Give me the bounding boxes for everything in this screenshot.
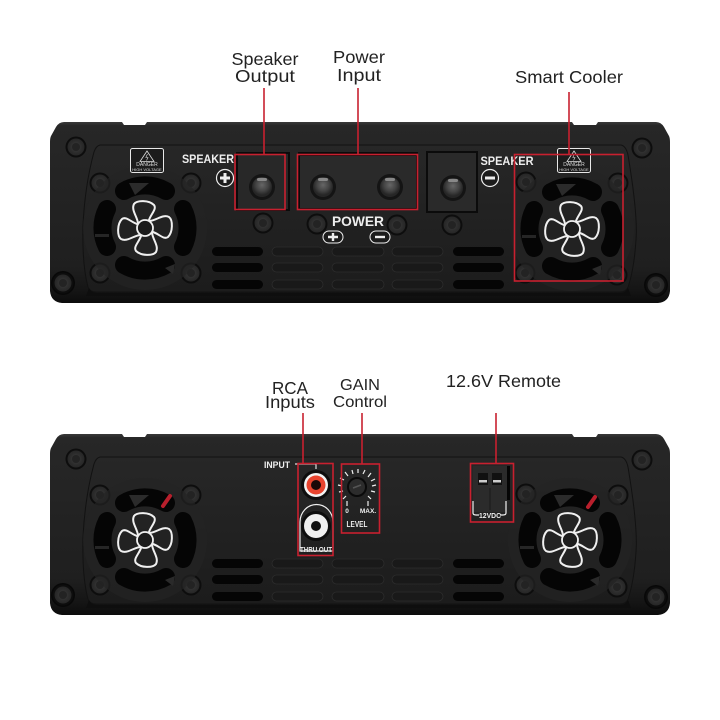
gain level knob: LEVEL: [346, 520, 368, 529]
callout: RCA inputs: [265, 378, 333, 556]
gain level knob: MAX.: [360, 508, 376, 515]
red RCA jack: [301, 470, 331, 500]
power polarity marking: POWER: [332, 213, 384, 229]
icon: right cooling fan: [510, 167, 634, 291]
icon: right cooling fan: [508, 478, 632, 602]
callout: gain control: Control: [333, 394, 387, 411]
screws beneath terminals: [252, 212, 462, 236]
warning badge right: [558, 148, 590, 172]
warning badge left: [130, 148, 164, 172]
callout: speaker output: Speaker: [232, 49, 299, 69]
power terminal block: [299, 153, 417, 209]
callout: smart cooler: [514, 67, 623, 281]
callout: 12.6V remote: 12.6V Remote: [446, 371, 561, 391]
icon: left cooling fan: [83, 166, 207, 290]
12VDC remote connector: 12VDC: [479, 511, 502, 520]
callout: speaker output: Output: [235, 66, 295, 86]
callout: RCA inputs: Inputs: [265, 392, 315, 412]
gain level knob: 0: [345, 508, 349, 515]
amplifier chassis: [50, 122, 670, 303]
icon: left cooling fan: [83, 478, 207, 602]
speaker minus marking: [480, 154, 534, 186]
callout: 12.6V remote: [446, 371, 561, 522]
gain level knob: [338, 469, 376, 529]
callout: power input: Power: [333, 47, 385, 67]
white RCA jack: [301, 511, 331, 541]
amplifier top view: power side: [50, 122, 670, 303]
12VDC remote connector: [473, 466, 510, 520]
RCA input markings: [264, 460, 333, 554]
callout: gain control: [333, 377, 387, 533]
speaker minus marking: SPEAKER: [480, 154, 534, 168]
power polarity marking: [323, 213, 390, 243]
speaker plus marking: SPEAKER: [182, 152, 234, 166]
RCA input markings: INPUT: [264, 460, 290, 470]
callout: power input: [298, 47, 418, 210]
callout: RCA inputs: RCA: [272, 378, 308, 398]
amplifier chassis: [50, 434, 670, 615]
amplifier bottom view: signal side: [50, 434, 670, 615]
speaker plus marking: [182, 152, 234, 186]
callout: speaker output: [232, 49, 299, 210]
speaker minus terminal: [427, 152, 477, 212]
callout: smart cooler: Smart Cooler: [515, 67, 623, 87]
callout: gain control: GAIN: [340, 377, 380, 394]
callout: power input: Input: [337, 65, 381, 85]
speaker plus terminal: [237, 153, 289, 210]
red fan wires: [163, 496, 595, 507]
RCA input markings: THRU OUT: [300, 545, 332, 554]
